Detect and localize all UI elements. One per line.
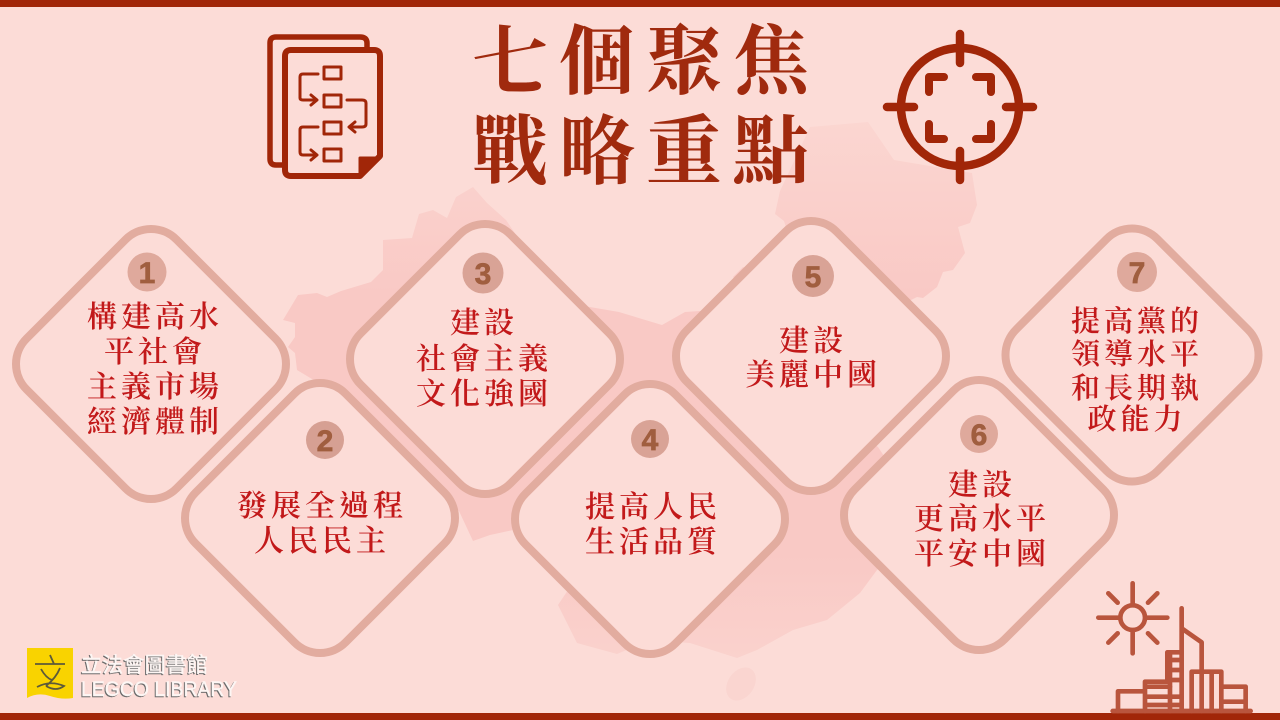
panel: item 2: 人民民主	[254, 516, 390, 560]
panel: item 5: 5	[805, 261, 821, 294]
panel: item 7: 領導水平	[1071, 332, 1203, 373]
panel: item 1: 經濟體制	[87, 397, 223, 441]
logo text: LEGCO LIBRARY	[81, 678, 237, 701]
title	[472, 1, 820, 200]
panel: item 4: 生活品質	[585, 517, 721, 561]
panel: item 6: 建設	[948, 460, 1016, 504]
icon: target crosshair	[887, 34, 1033, 180]
top bar	[0, 0, 1280, 7]
title: 七個聚焦	[472, 1, 820, 110]
panel: item 3: 3	[475, 258, 491, 291]
bottom bar	[0, 713, 1280, 720]
panel: item 2: 2	[317, 425, 333, 458]
panel: item 5: 建設	[779, 316, 847, 360]
panel: item 3: 社會主義	[416, 334, 552, 378]
logo text	[81, 654, 237, 701]
panel: item 1: 構建高水	[87, 292, 223, 336]
title: 戰略重點	[472, 91, 820, 200]
panel: item 7: 政能力	[1087, 397, 1187, 438]
panel: item 7: 和長期執	[1071, 366, 1203, 407]
panel: item 1: 平社會	[104, 327, 206, 371]
panel: item 1: 主義市場	[87, 362, 223, 406]
panel: item 7: 7	[1129, 257, 1145, 290]
panel: item 3	[335, 209, 635, 509]
panel: item 4: 提高人民	[585, 482, 721, 526]
background map of China	[283, 122, 977, 706]
panel: item 4: 4	[642, 424, 659, 457]
panel: item 4	[500, 369, 800, 669]
icon: sun and city skyline	[1098, 583, 1251, 711]
panel: item 5	[661, 206, 961, 506]
panel: item 7: 提高黨的	[1071, 299, 1203, 340]
panel: item 1: 1	[139, 257, 155, 290]
panel: item 3: 文化強國	[416, 369, 552, 413]
logo: LegCo Library	[27, 648, 237, 701]
panel: item 2: 發展全過程	[237, 481, 407, 525]
logo text: 立法會圖書館	[81, 654, 208, 677]
logo badge	[27, 648, 73, 699]
panel: item 3: 建設	[450, 298, 518, 342]
panel: item 5: 美麗中國	[745, 350, 881, 394]
panel: item 1	[1, 214, 301, 514]
panel: item 6: 6	[971, 419, 987, 452]
panel: item 7	[991, 214, 1273, 496]
icon: document flowchart	[270, 37, 380, 176]
panel: item 2	[170, 368, 470, 668]
panel: item 6: 平安中國	[914, 529, 1050, 573]
panel: item 6	[829, 365, 1129, 665]
panel: item 6: 更高水平	[914, 494, 1050, 538]
